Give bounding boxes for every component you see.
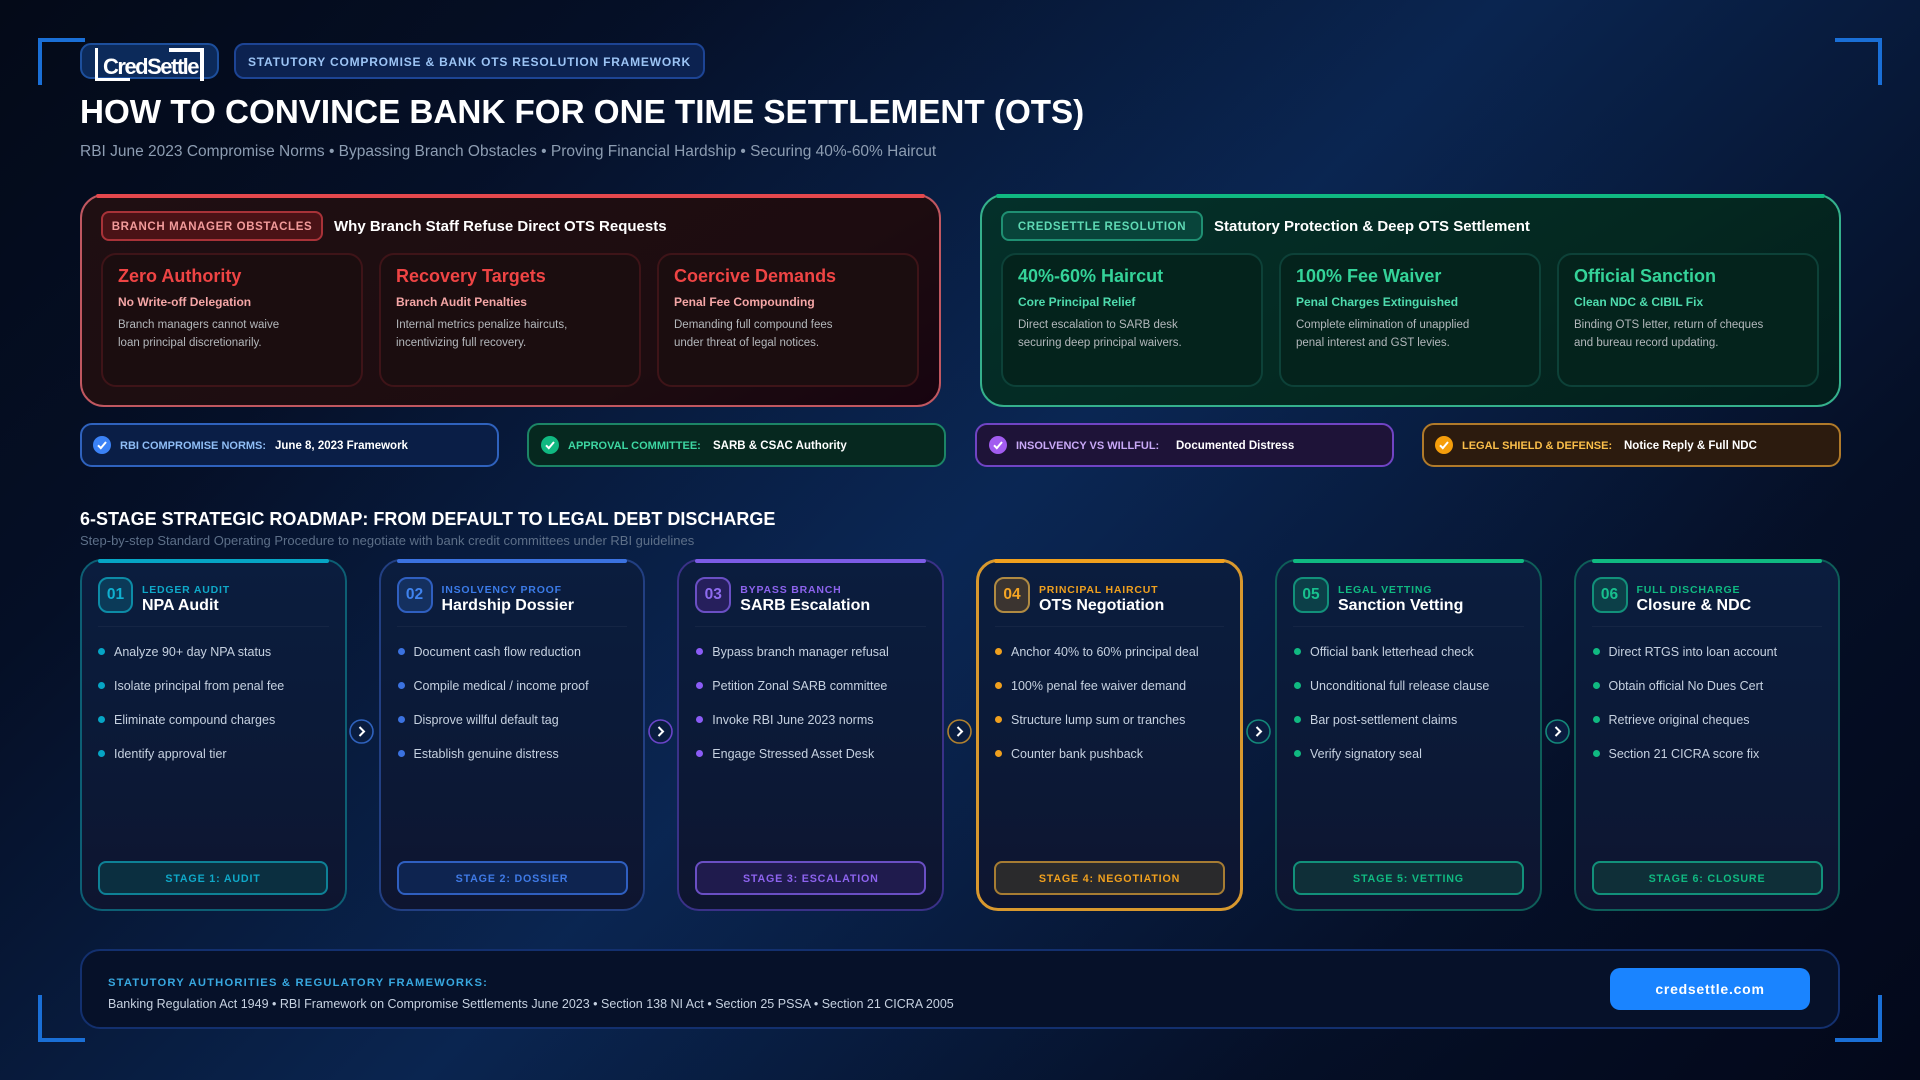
card: fee waiver (1279, 253, 1541, 387)
checklist: Official bank letterhead check (1310, 645, 1474, 659)
website button (1610, 968, 1810, 1010)
label: LEGAL SHIELD & DEFENSE: (1462, 440, 1612, 452)
stage number (994, 577, 1030, 613)
arrow 2 to 3 (648, 719, 673, 744)
checklist: 100% penal fee waiver demand (1011, 679, 1186, 693)
checklist: Invoke RBI June 2023 norms (712, 713, 874, 727)
card description: under threat of legal notices. (674, 337, 819, 349)
footer panel (80, 949, 1840, 1029)
icon: check (989, 436, 1007, 454)
card description (396, 319, 567, 349)
icon: check (541, 436, 559, 454)
stage button: STAGE 4: NEGOTIATION (1039, 873, 1180, 885)
subtitle: RBI June 2023 Compromise Norms • Bypassing Branch Obstacles • Proving Financial Hardship • Securing 40%-60% Haircut (80, 143, 936, 160)
badge: resolution (1001, 211, 1203, 241)
value: Documented Distress (1176, 440, 1294, 452)
card subtitle: Core Principal Relief (1018, 295, 1135, 309)
card description: Branch managers cannot waive (118, 319, 279, 331)
logo: CredSettle (80, 43, 219, 79)
stage number: 02 (406, 586, 423, 603)
arrow 4 to 5 (1246, 719, 1271, 744)
card description (1574, 319, 1763, 349)
stage number: 06 (1601, 586, 1618, 603)
stage button (98, 861, 328, 895)
eyebrow: INSOLVENCY PROOF (442, 584, 562, 596)
checklist: Analyze 90+ day NPA status (114, 645, 271, 659)
stage card 06 (1574, 559, 1840, 911)
arrow 1 to 2 (349, 719, 374, 744)
checklist: Establish genuine distress (414, 747, 559, 761)
checklist: Retrieve original cheques (1608, 713, 1750, 727)
stage button: STAGE 3: ESCALATION (743, 873, 879, 885)
roadmap heading: 6-STAGE STRATEGIC ROADMAP: FROM DEFAULT TO LEGAL DEBT DISCHARGE (80, 509, 775, 529)
stage button: STAGE 5: VETTING (1353, 873, 1464, 885)
corner bracket bottom-left (38, 995, 85, 1042)
card title: 100% Fee Waiver (1296, 266, 1441, 286)
card description: Internal metrics penalize haircuts, (396, 319, 567, 331)
arrow 3 to 4 (947, 719, 972, 744)
value: Notice Reply & Full NDC (1624, 440, 1757, 452)
checklist (995, 645, 1199, 761)
stage title: NPA Audit (142, 597, 219, 614)
title: HOW TO CONVINCE BANK FOR ONE TIME SETTLEMENT (OTS) (80, 94, 1084, 131)
stage card 01 (80, 559, 347, 911)
footer heading: STATUTORY AUTHORITIES & REGULATORY FRAMEWORKS: (108, 977, 488, 989)
checklist (1294, 645, 1489, 761)
checklist: Eliminate compound charges (114, 713, 275, 727)
badge: obstacles (101, 211, 323, 241)
status pill: approval committee (527, 423, 946, 467)
card subtitle: Penal Charges Extinguished (1296, 295, 1458, 309)
card: zero authority (101, 253, 363, 387)
card description: Binding OTS letter, return of cheques (1574, 319, 1763, 331)
stage number (1293, 577, 1329, 613)
checklist: Obtain official No Dues Cert (1608, 679, 1763, 693)
checklist: Engage Stressed Asset Desk (712, 747, 874, 761)
logo: CredSettle: CredSettle (103, 54, 198, 79)
badge: resolution: CREDSETTLE RESOLUTION (1018, 221, 1186, 233)
stage card 02 (378, 559, 645, 911)
status pill: RBI norms (80, 423, 499, 467)
card description: penal interest and GST levies. (1296, 337, 1450, 349)
card description: and bureau record updating. (1574, 337, 1718, 349)
label: RBI COMPROMISE NORMS: (120, 440, 266, 452)
checklist (398, 645, 589, 761)
eyebrow: LEDGER AUDIT (142, 584, 230, 596)
framework badge: STATUTORY COMPROMISE & BANK OTS RESOLUTION FRAMEWORK (248, 55, 691, 69)
card description: loan principal discretionarily. (118, 337, 262, 349)
arrow 5 to 6 (1545, 719, 1570, 744)
card description: incentivizing full recovery. (396, 337, 526, 349)
card title: Zero Authority (118, 266, 241, 286)
stage title: OTS Negotiation (1039, 597, 1164, 614)
checklist: Unconditional full release clause (1310, 679, 1489, 693)
stage button: STAGE 6: CLOSURE (1649, 873, 1765, 885)
checklist: Anchor 40% to 60% principal deal (1011, 645, 1199, 659)
badge: obstacles: BRANCH MANAGER OBSTACLES (112, 221, 312, 233)
card subtitle: Clean NDC & CIBIL Fix (1574, 295, 1703, 309)
checklist: Disprove willful default tag (414, 713, 559, 727)
stage number: 01 (107, 586, 124, 603)
stage button (396, 861, 628, 895)
website button: credsettle.com (1655, 981, 1765, 997)
card: haircut (1001, 253, 1263, 387)
stage number (695, 577, 731, 613)
stage number: 03 (705, 586, 722, 603)
card description: securing deep principal waivers. (1018, 337, 1182, 349)
card subtitle: Branch Audit Penalties (396, 295, 527, 309)
checklist: Bypass branch manager refusal (712, 645, 889, 659)
checklist: Compile medical / income proof (414, 679, 589, 693)
card title: Coercive Demands (674, 266, 836, 286)
status pill: legal shield (1422, 423, 1841, 467)
panel heading: Statutory Protection & Deep OTS Settlement (1214, 218, 1530, 235)
eyebrow: LEGAL VETTING (1338, 584, 1432, 596)
checklist: Isolate principal from penal fee (114, 679, 284, 693)
checklist: Bar post-settlement claims (1310, 713, 1457, 727)
checklist (1593, 645, 1777, 761)
stage number (1592, 577, 1628, 613)
stage button: STAGE 1: AUDIT (165, 873, 261, 885)
eyebrow: BYPASS BRANCH (740, 584, 842, 596)
icon: check (1435, 436, 1453, 454)
stage number: 05 (1302, 586, 1320, 603)
label: APPROVAL COMMITTEE: (568, 440, 701, 452)
card: recovery targets (379, 253, 641, 387)
panel: branch manager obstacles (80, 194, 941, 407)
corner bracket top-left (38, 38, 85, 85)
stage card 05 (1275, 559, 1542, 911)
card title: 40%-60% Haircut (1018, 266, 1163, 286)
checklist: Identify approval tier (114, 747, 227, 761)
stage title: Closure & NDC (1636, 597, 1751, 614)
corner bracket bottom-right (1835, 995, 1882, 1042)
panel heading: Why Branch Staff Refuse Direct OTS Requests (334, 218, 667, 235)
checklist (98, 645, 284, 761)
card description (674, 319, 833, 349)
stage button (695, 861, 926, 895)
eyebrow: PRINCIPAL HAIRCUT (1039, 584, 1158, 596)
checklist: Direct RTGS into loan account (1608, 645, 1777, 659)
stage title: SARB Escalation (740, 597, 870, 614)
stage title: Sanction Vetting (1338, 597, 1463, 614)
checklist: Structure lump sum or tranches (1011, 713, 1185, 727)
status pill: insolvency vs willful (975, 423, 1394, 467)
checklist: Verify signatory seal (1310, 747, 1422, 761)
icon: check (93, 436, 111, 454)
stage title: Hardship Dossier (442, 597, 574, 614)
stage number (98, 577, 133, 613)
card description: Demanding full compound fees (674, 319, 833, 331)
stage number (396, 577, 432, 613)
checklist: Document cash flow reduction (414, 645, 581, 659)
checklist: Petition Zonal SARB committee (712, 679, 887, 693)
card: coercive demands (657, 253, 919, 387)
card description (1018, 319, 1182, 349)
checklist: Section 21 CICRA score fix (1608, 747, 1759, 761)
framework badge (234, 43, 705, 79)
card description: Complete elimination of unapplied (1296, 319, 1469, 331)
stage card 04 highlighted (976, 559, 1243, 911)
stage card 03 (677, 559, 944, 911)
card title: Official Sanction (1574, 266, 1716, 286)
corner bracket top-right (1835, 38, 1882, 85)
card subtitle: Penal Fee Compounding (674, 295, 815, 309)
checklist: Counter bank pushback (1011, 747, 1143, 761)
stage button (1293, 861, 1524, 895)
card title: Recovery Targets (396, 266, 546, 286)
panel: credsettle resolution (980, 194, 1841, 407)
checklist (696, 645, 889, 761)
eyebrow: FULL DISCHARGE (1636, 584, 1740, 596)
value: June 8, 2023 Framework (275, 440, 408, 452)
card description (1296, 319, 1469, 349)
card subtitle: No Write-off Delegation (118, 295, 251, 309)
card: official sanction (1557, 253, 1819, 387)
roadmap subheading: Step-by-step Standard Operating Procedure to negotiate with bank credit committees under RBI guidelines (80, 533, 694, 548)
card description: Direct escalation to SARB desk (1018, 319, 1178, 331)
label: INSOLVENCY VS WILLFUL: (1016, 440, 1159, 452)
stage button (994, 861, 1225, 895)
stage button: STAGE 2: DOSSIER (456, 873, 568, 885)
stage button (1592, 861, 1822, 895)
value: SARB & CSAC Authority (713, 440, 847, 452)
card description (118, 319, 279, 349)
footer references: Banking Regulation Act 1949 • RBI Framework on Compromise Settlements June 2023 • Section 138 NI Act • Section 25 PSSA • Section 21 CICRA 2005 (108, 997, 954, 1011)
stage number: 04 (1003, 586, 1021, 603)
